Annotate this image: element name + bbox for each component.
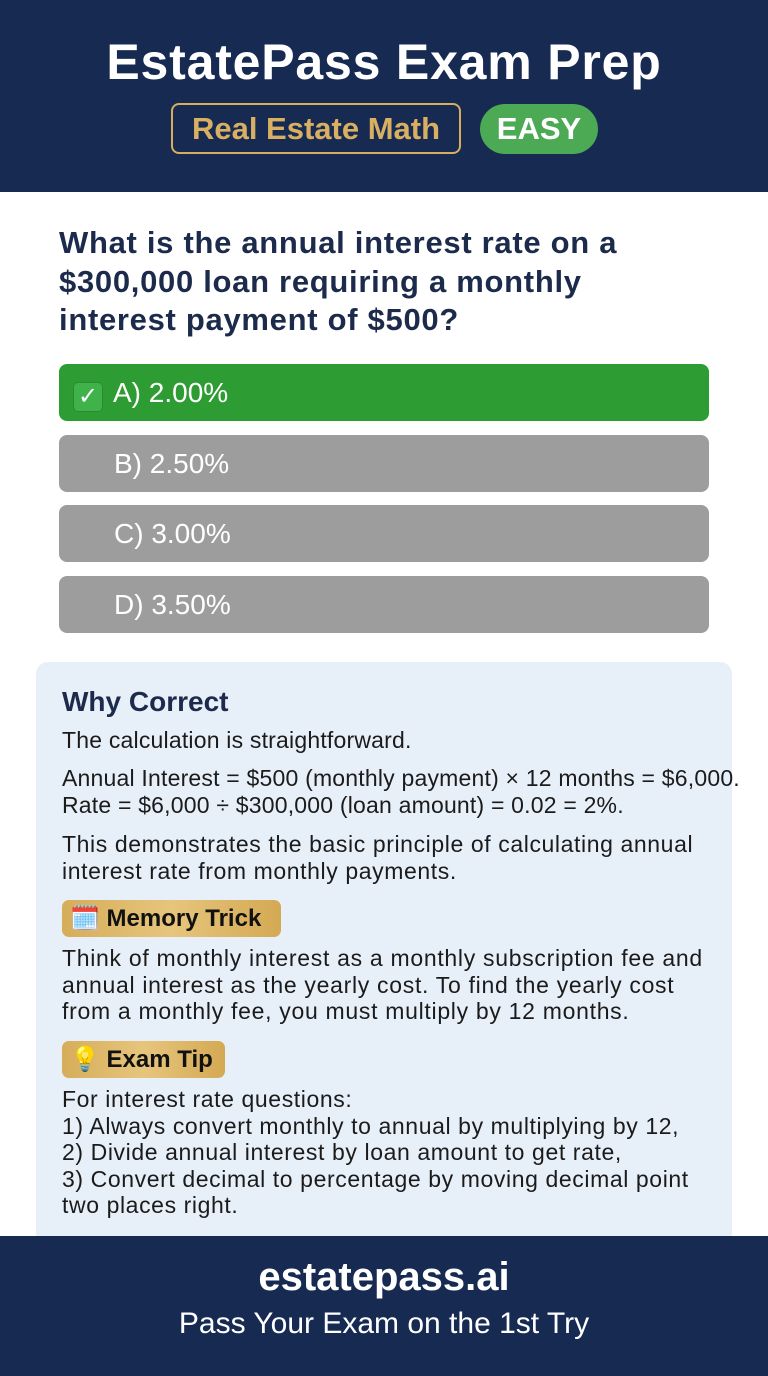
text: exam tip: 1) Always convert monthly to annual by multiplying by 12,	[62, 1112, 679, 1138]
footer	[0, 1236, 768, 1376]
footer: site: estatepass.ai	[258, 1255, 510, 1299]
question: interest payment of $500?	[59, 302, 459, 337]
text: memory trick	[62, 945, 703, 1024]
text: explanation: The calculation is straightforward.	[62, 727, 412, 753]
badge: exam tip	[62, 1041, 225, 1078]
text: principle	[62, 831, 693, 884]
badge: memory trick	[62, 900, 281, 937]
panel: explanation	[36, 662, 732, 1262]
footer: tagline: Pass Your Exam on the 1st Try	[179, 1307, 589, 1340]
header	[0, 0, 768, 192]
option C	[59, 505, 709, 562]
option D: D) 3.50%	[114, 589, 231, 620]
text: principle: This demonstrates the basic principle of calculating annual	[62, 831, 693, 857]
text: formula: Rate = $6,000 ÷ $300,000 (loan amount) = 0.02 = 2%.	[62, 792, 624, 818]
text: exam tip: two places right.	[62, 1192, 238, 1218]
option A correct	[59, 364, 709, 421]
text: exam tip: 3) Convert decimal to percentage by moving decimal point	[62, 1166, 689, 1192]
text: formula: Annual Interest = $500 (monthly payment) × 12 months = $6,000.	[62, 765, 740, 791]
heading: why correct: Why Correct	[62, 686, 228, 717]
badge: memory trick: 🗓️ Memory Trick	[70, 905, 261, 932]
text: memory trick: annual interest as the yearly cost. To find the yearly cost	[62, 972, 674, 998]
text: principle: interest rate from monthly payments.	[62, 858, 457, 884]
question	[59, 225, 617, 337]
option A correct: ✓	[78, 383, 98, 410]
text: memory trick: from a monthly fee, you must multiply by 12 months.	[62, 998, 629, 1024]
text: memory trick: Think of monthly interest as a monthly subscription fee and	[62, 945, 703, 971]
option B	[59, 435, 709, 492]
option C: C) 3.00%	[114, 518, 231, 549]
option D	[59, 576, 709, 633]
title: EstatePass Exam Prep	[106, 34, 662, 90]
badge: topic: Real Estate Math	[192, 111, 440, 146]
text: exam tip: For interest rate questions:	[62, 1086, 352, 1112]
text: exam tip: 2) Divide annual interest by loan amount to get rate,	[62, 1139, 622, 1165]
badge: topic	[171, 103, 461, 154]
option B: B) 2.50%	[114, 448, 229, 479]
badge: exam tip: 💡 Exam Tip	[70, 1046, 213, 1073]
question: $300,000 loan requiring a monthly	[59, 264, 582, 298]
badge: difficulty	[480, 104, 598, 154]
text: exam tip	[62, 1086, 689, 1218]
text: formula	[62, 765, 740, 818]
badge: difficulty: EASY	[497, 111, 581, 146]
question: What is the annual interest rate on a	[59, 225, 617, 260]
option A correct: A) 2.00%	[113, 377, 228, 408]
